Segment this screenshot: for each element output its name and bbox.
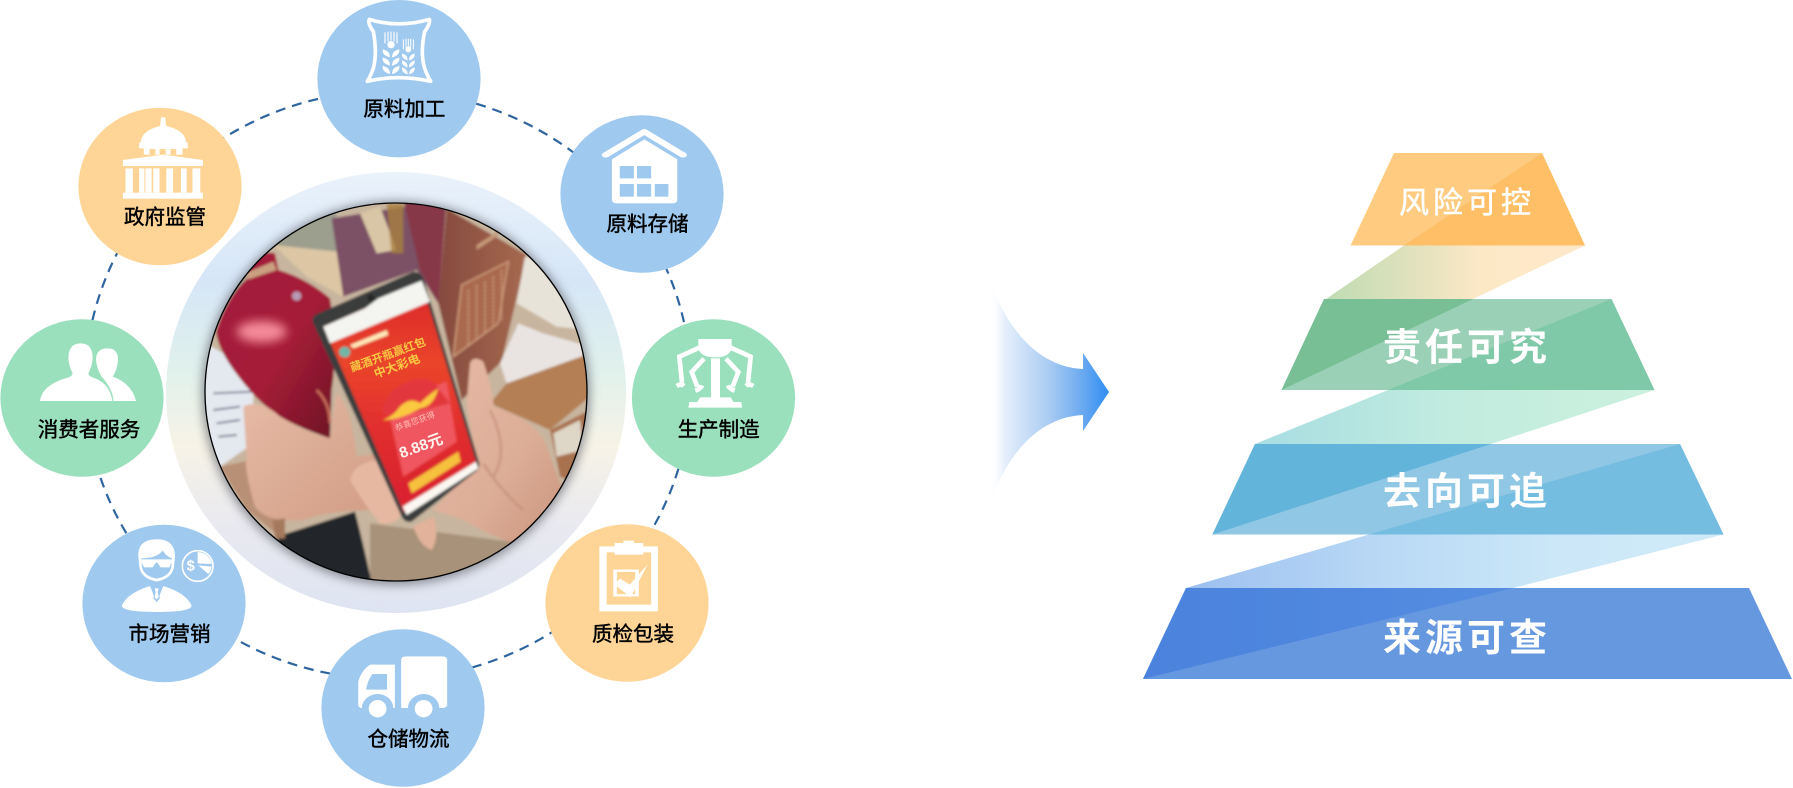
node: 消费者服务 <box>0 319 164 477</box>
label: 政府监管 <box>124 206 206 229</box>
icon: grain sack <box>367 19 431 81</box>
phone screen text: 8.88元 <box>397 431 445 462</box>
icon: government building <box>123 117 203 199</box>
central photo ring <box>166 172 626 613</box>
circle <box>78 108 242 265</box>
label: 市场营销 <box>128 623 210 646</box>
circle <box>321 629 485 787</box>
level: 去向可追: 去向可追 <box>1383 472 1551 514</box>
icon: robot arm <box>677 339 753 408</box>
phone screen text <box>348 334 445 462</box>
icon: marketer with sunglasses and pie chart <box>122 539 213 612</box>
label: 原料存储 <box>606 213 688 236</box>
circle <box>545 524 709 682</box>
phone screen text: 恭喜您获得 <box>394 409 436 433</box>
circle <box>560 115 724 273</box>
phone screen text: 中大彩电 <box>372 351 422 381</box>
level: 风险可控 <box>1350 153 1585 246</box>
node: 仓储物流 <box>321 629 485 787</box>
level: 来源可查 <box>1143 588 1792 679</box>
connector: 责任可究 to 风险可控 <box>1326 246 1585 299</box>
icon: truck <box>358 656 447 722</box>
node: 质检包装 <box>545 524 709 682</box>
icon: two people <box>40 343 136 401</box>
label: 消费者服务 <box>38 418 140 442</box>
node: 原料存储 <box>560 115 724 273</box>
label: 仓储物流 <box>368 728 450 751</box>
icon: marketer with sunglasses and pie chart: $ <box>187 559 195 575</box>
icon: warehouse <box>606 132 683 203</box>
circle <box>632 319 795 477</box>
node: 市场营销 <box>82 525 246 682</box>
connector: 去向可追 to 责任可究 <box>1255 390 1654 444</box>
icon: clipboard check <box>599 541 658 611</box>
level: 去向可追 <box>1212 444 1724 534</box>
level: 风险可控: 风险可控 <box>1399 187 1535 220</box>
label: 原料加工 <box>363 98 445 121</box>
node: 原料加工 <box>317 0 481 157</box>
label: 质检包装 <box>592 623 674 646</box>
pyramid <box>1143 153 1792 679</box>
level: 责任可究 <box>1282 299 1654 390</box>
photo border <box>205 203 587 581</box>
node: 政府监管 <box>78 108 242 265</box>
label: 生产制造 <box>678 418 760 442</box>
level: 来源可查: 来源可查 <box>1383 618 1551 660</box>
photo shadow <box>202 201 590 585</box>
connector: 来源可查 to 去向可追 <box>1186 534 1724 588</box>
circle <box>0 319 164 477</box>
node: 生产制造 <box>632 319 795 477</box>
gradient ring <box>166 172 626 613</box>
circle <box>317 0 481 157</box>
arrow <box>990 280 1109 503</box>
photo: hand scanning bottle with phone <box>204 202 588 582</box>
dashed connecting ring <box>85 91 691 679</box>
phone screen text: 藏酒开瓶赢红包 <box>348 334 428 375</box>
level: 责任可究: 责任可究 <box>1383 328 1551 370</box>
circle <box>82 525 246 682</box>
